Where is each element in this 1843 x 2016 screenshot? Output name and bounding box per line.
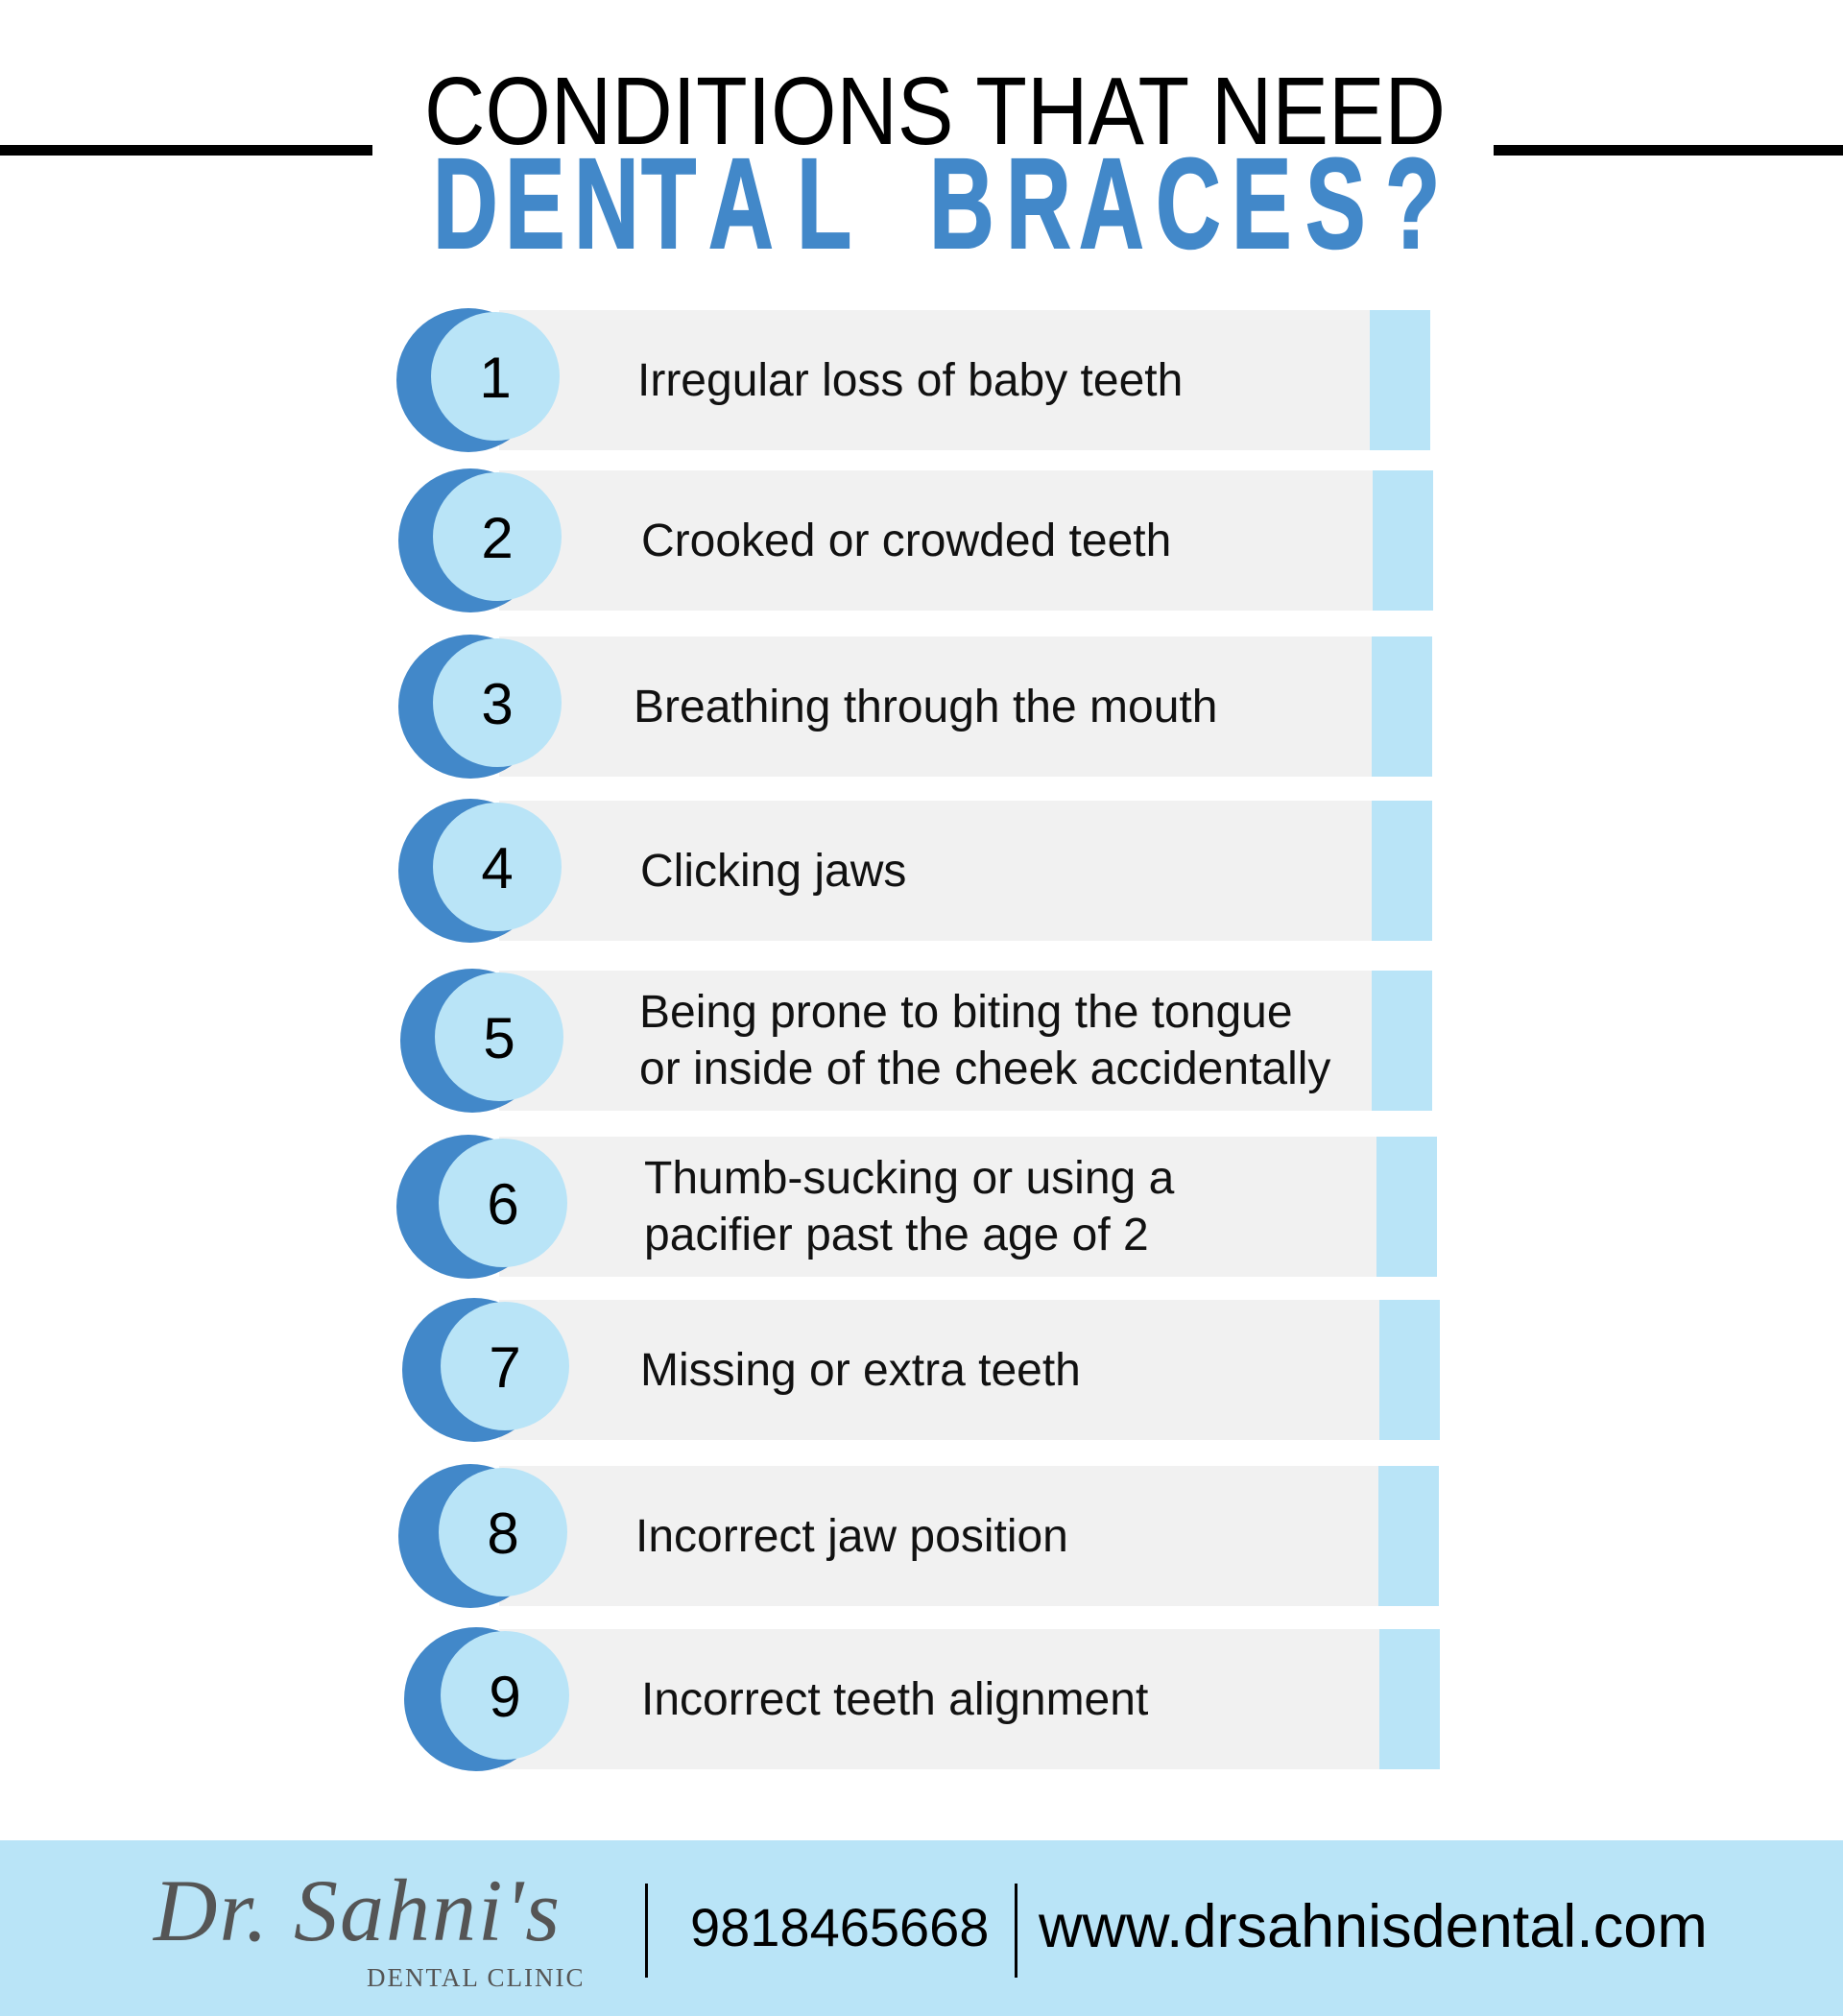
logo: Dr. Sahni's — [154, 1861, 562, 1959]
item 1 — [396, 308, 1430, 452]
item 5 — [400, 969, 1432, 1113]
item 6: 6 — [487, 1172, 519, 1236]
item 7 — [402, 1298, 1440, 1442]
item 5: Being prone to biting the tongue — [639, 987, 1293, 1038]
website: www.drsahnisdental.com — [1039, 1893, 1708, 1960]
item 9: 9 — [489, 1665, 521, 1729]
item 1: 1 — [479, 346, 512, 410]
item 7: Missing or extra teeth — [640, 1344, 1081, 1396]
item 3 — [398, 635, 1432, 779]
item 6: Thumb-sucking or using a — [644, 1153, 1174, 1204]
item 9 — [404, 1627, 1440, 1771]
logo: DENTAL CLINIC — [367, 1963, 586, 1992]
item 8: 8 — [487, 1501, 519, 1566]
item 4: Clicking jaws — [640, 845, 906, 897]
phone: 9818465668 — [690, 1897, 989, 1957]
item 7: 7 — [489, 1335, 521, 1400]
item 3: Breathing through the mouth — [634, 682, 1217, 732]
title rule left — [0, 145, 372, 156]
item 1: Irregular loss of baby teeth — [637, 355, 1183, 405]
item 6 — [396, 1135, 1437, 1279]
item 3: 3 — [481, 672, 514, 736]
footer — [0, 1840, 1843, 2016]
item 4 — [398, 799, 1432, 943]
title — [424, 58, 1446, 269]
item 8 — [398, 1464, 1439, 1608]
item 4: 4 — [481, 836, 514, 900]
item 2 — [398, 468, 1433, 612]
item 5: 5 — [483, 1006, 515, 1070]
item 6: pacifier past the age of 2 — [644, 1210, 1149, 1260]
item 2: Crooked or crowded teeth — [641, 515, 1171, 566]
title rule right — [1494, 145, 1843, 156]
item 5: or inside of the cheek accidentally — [639, 1044, 1330, 1094]
title: CONDITIONS THAT NEED — [424, 58, 1446, 165]
item 9: Incorrect teeth alignment — [641, 1674, 1148, 1724]
item 8: Incorrect jaw position — [635, 1511, 1068, 1561]
item 2: 2 — [481, 506, 514, 570]
